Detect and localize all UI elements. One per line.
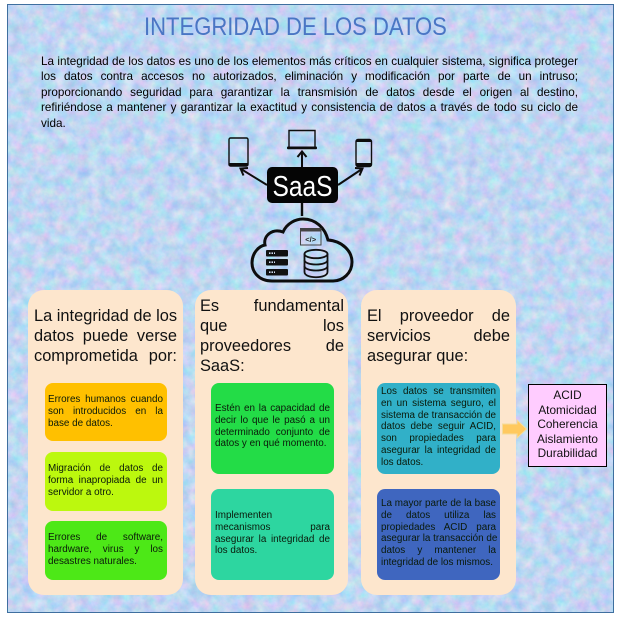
arrow: to ACID box: [502, 419, 527, 439]
card: propiedades ACID: integridad de los mismos.: [381, 557, 493, 568]
ACID box: ACID: [553, 388, 582, 402]
card: errores humanos: base de datos.: [48, 418, 113, 429]
card: implementen mecanismos: [211, 489, 334, 580]
intro text block: proporcionando seguridad para garantizar la transmisión de datos desde el origen al destino,: [41, 86, 578, 99]
panel heading: [34, 307, 177, 365]
panel heading: El proveedor de: [367, 307, 510, 325]
card: capacidad de decir: determinado conjunto de: [215, 427, 330, 438]
card: datos transmitidos: asegurar la integridad de: [381, 445, 496, 456]
card: capacidad de decir: decir lo que le pasó a un: [215, 415, 330, 426]
card: implementen mecanismos: los datos.: [215, 545, 257, 556]
card: datos transmitidos: Los datos se transmiten: [381, 386, 496, 397]
arrow: to phone: [338, 168, 362, 185]
title: INTEGRIDAD DE LOS DATOS: [144, 13, 447, 41]
card: propiedades ACID: datos y mantener la: [381, 545, 496, 556]
card: datos transmitidos: los datos.: [381, 457, 423, 468]
card: datos transmitidos: sistema de transacción de: [381, 410, 496, 421]
icon: cloud: [252, 219, 352, 281]
ACID box: Aislamiento: [537, 432, 598, 446]
intro text block: los datos contra accesos no autorizados, eliminación y modificación por parte de un intruso;: [41, 70, 578, 83]
SaaS badge: SaaS: [272, 171, 332, 203]
ACID box: [528, 384, 607, 467]
panel heading: SaaS:: [200, 357, 245, 375]
intro text block: [41, 55, 578, 130]
card: migración de datos: Migración de datos de: [48, 463, 163, 474]
card: propiedades ACID: asegurar la transacción de: [381, 533, 497, 544]
card: migración de datos: forma inapropiada de un: [48, 475, 163, 486]
arrow: to tablet: [240, 168, 267, 185]
panel heading: comprometida por:: [34, 347, 177, 365]
card: errores humanos: Errores humanos cuando: [48, 394, 163, 405]
card: datos transmitidos: en un sistema seguro, el: [381, 398, 496, 409]
card: errores humanos: [45, 383, 167, 441]
panel heading: proveedores de: [200, 337, 344, 355]
intro text block: La integridad de los datos es uno de los elementos más críticos en cualquier sistema, significa proteger: [41, 55, 578, 68]
ACID box: Coherencia: [537, 417, 598, 431]
panel: proveedores de SaaS: [195, 290, 348, 595]
card: errores de software: desastres naturales.: [48, 556, 137, 567]
card: migración de datos: servidor a otro.: [48, 487, 114, 498]
arrow: cloud to SaaS: [301, 203, 303, 216]
card: capacidad de decir: [211, 383, 334, 474]
icon: servers: [266, 250, 288, 276]
card: errores de software: [45, 521, 167, 580]
panel heading: [367, 307, 510, 365]
card: errores humanos: son introducidos en la: [48, 406, 163, 417]
panel heading: La integridad de los: [34, 307, 177, 325]
card: propiedades ACID: La mayor parte de la base: [381, 498, 496, 509]
arrow: to laptop: [298, 152, 306, 167]
card: datos transmitidos: [377, 383, 500, 474]
card: capacidad de decir: Estén en la capacidad de: [215, 403, 330, 414]
card: implementen mecanismos: mecanismos para: [215, 522, 330, 533]
panel heading: [200, 297, 344, 375]
icon: phone: [356, 140, 372, 166]
card: errores de software: hardware, virus y los: [48, 544, 163, 555]
icon: laptop: [287, 130, 317, 149]
ACID box: Durabilidad: [538, 446, 597, 460]
panel heading: asegurar que:: [367, 347, 468, 365]
card: propiedades ACID: propiedades ACID para: [381, 522, 496, 533]
panel heading: servicios debe: [367, 327, 510, 345]
panel heading: datos puede verse: [34, 327, 177, 345]
card: implementen mecanismos: asegurar la integridad de: [215, 534, 330, 545]
panel: integridad comprometida: [28, 290, 183, 595]
icon: tablet: [229, 138, 248, 166]
ACID box: Atomicidad: [538, 402, 597, 416]
card: propiedades ACID: de datos utiliza las: [381, 510, 496, 521]
card: errores de software: Errores de software,: [48, 532, 163, 543]
panel: proveedor de servicios: [361, 290, 516, 595]
icon: database: [304, 250, 328, 277]
panel heading: que los: [200, 317, 344, 335]
SaaS diagram: [228, 130, 372, 282]
card: propiedades ACID: [377, 489, 500, 580]
panel heading: Es fundamental: [200, 297, 344, 315]
intro text block: refiriéndose a mantener y garantizar la exactitud y consistencia de datos a través de todo su ciclo de: [41, 101, 578, 114]
card: datos transmitidos: son propiedades para: [381, 433, 496, 444]
card: migración de datos: [45, 452, 167, 511]
card: implementen mecanismos: Implementen: [215, 510, 272, 521]
intro text block: vida.: [41, 117, 66, 130]
card: capacidad de decir: datos y en qué momento.: [215, 438, 326, 449]
icon: code window: </>: [305, 235, 317, 244]
card: datos transmitidos: datos debe seguir ACID,: [381, 421, 496, 432]
